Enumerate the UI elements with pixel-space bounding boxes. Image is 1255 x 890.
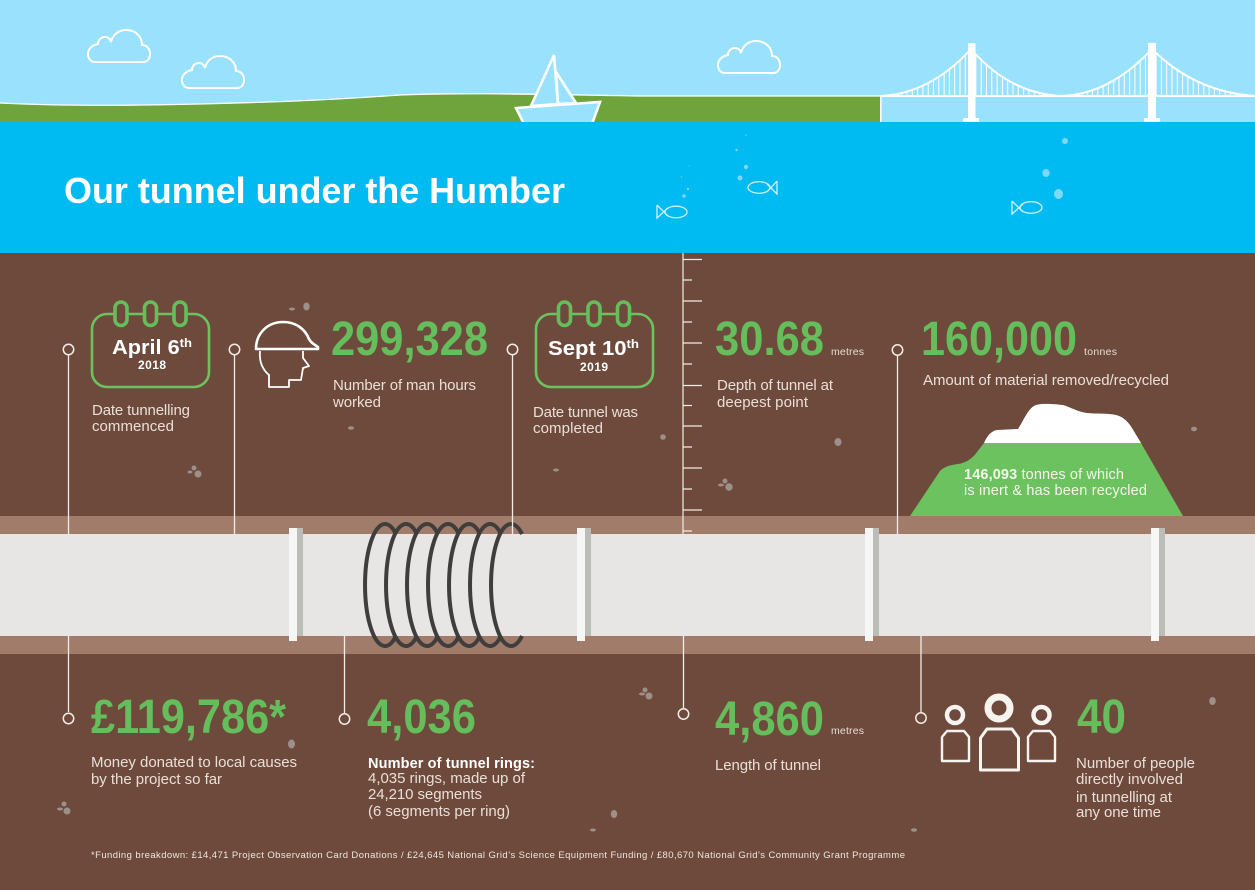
stat: people involved: directly involved — [1076, 771, 1183, 788]
icon: spoil heap: 146,093 tonnes of which — [964, 467, 1124, 483]
stat: tunnel rings — [367, 691, 535, 820]
icon: cloud three — [718, 41, 780, 73]
stat: tunnel length: 4,860 — [715, 693, 824, 746]
stat: tunnelling start date: 2018 — [138, 358, 166, 372]
stat: tunnel rings: (6 segments per ring) — [368, 803, 510, 820]
icon: fish three — [1012, 201, 1042, 214]
title: Our tunnel under the Humber — [64, 170, 565, 211]
stat: tunnel completion date: Date tunnel was — [533, 404, 638, 421]
icon: fish two — [748, 181, 777, 194]
tunnel joints — [289, 528, 1165, 641]
icon: cloud one — [88, 30, 150, 62]
stat: tunnel depth — [715, 313, 864, 411]
icon: spoil heap: is inert & has been recycled — [964, 483, 1147, 499]
stat: tunnel length: Length of tunnel — [715, 757, 821, 774]
icon: worker in hard hat — [256, 322, 318, 387]
bubbles — [681, 134, 1068, 199]
stat: tunnelling start date: Date tunnelling — [92, 402, 190, 419]
stat: tunnel rings: Number of tunnel rings: — [368, 756, 535, 772]
icon: cloud two — [182, 56, 244, 88]
stat: material removed: Amount of material removed/recycled — [923, 372, 1169, 389]
stat: tunnel rings: 24,210 segments — [368, 786, 482, 803]
stat: material removed: 160,000 — [921, 313, 1077, 366]
stat: tunnel completion date: 2019 — [580, 360, 608, 374]
connector lines — [63, 344, 926, 724]
icon: three people — [942, 697, 1055, 770]
stat: tunnelling start date: th — [180, 336, 192, 350]
icon: suspension bridge — [880, 43, 1255, 122]
stat: man hours — [256, 313, 488, 411]
icon: fish one — [657, 205, 687, 218]
panel: tunnel — [0, 516, 1255, 654]
stat: money donated: by the project so far — [91, 771, 222, 788]
icon: calendar — [536, 302, 653, 387]
stat: material removed: tonnes — [1084, 346, 1117, 358]
stat: tunnelling start date: April 6 — [112, 337, 174, 359]
stat: people involved: 40 — [1077, 691, 1126, 744]
stat: tunnel depth: Depth of tunnel at — [717, 377, 834, 394]
stat: tunnel rings: 4,036 — [367, 691, 476, 744]
stat: money donated — [91, 691, 297, 788]
stat: tunnel length: metres — [831, 725, 864, 737]
icon: tunnel rings — [365, 524, 522, 646]
panel: earth — [0, 253, 1255, 890]
stat: money donated: £119,786* — [91, 691, 286, 744]
depth scale ruler — [683, 253, 702, 534]
stat: people involved: Number of people — [1076, 755, 1195, 772]
stat: people involved — [942, 691, 1195, 821]
stat: tunnel depth: 30.68 — [715, 313, 824, 366]
stat: people involved: any one time — [1076, 804, 1161, 821]
panel: sky and landscape — [0, 0, 1255, 122]
stat: man hours: Number of man hours — [333, 377, 476, 394]
stat: tunnel depth: metres — [831, 346, 864, 358]
stat: tunnel completion date: th — [627, 337, 639, 351]
stat: tunnel completion date: Sept 10 — [548, 338, 619, 360]
stat: material removed — [910, 313, 1183, 516]
icon: calendar — [92, 302, 209, 387]
stat: man hours: 299,328 — [331, 313, 488, 366]
pebbles — [57, 302, 1216, 832]
stat: tunnel length — [715, 693, 864, 774]
stat: tunnelling start date: commenced — [92, 418, 174, 435]
stat: tunnel completion date — [533, 302, 653, 437]
stat: tunnel depth: deepest point — [717, 394, 809, 411]
footnote: *Funding breakdown: £14,471 Project Observation Card Donations / £24,645 National Grid’s Science Equipment Funding / £80,670 National Grid’s Community Grant Programme — [91, 850, 905, 861]
icon: sailing boat — [516, 55, 600, 124]
stat: people involved: in tunnelling at — [1076, 789, 1173, 806]
stat: tunnelling start date — [92, 302, 209, 435]
stat: money donated: Money donated to local causes — [91, 754, 297, 771]
icon: spoil heap — [910, 404, 1183, 516]
stat: tunnel rings: 4,035 rings, made up of — [368, 770, 526, 787]
stat: tunnel completion date: completed — [533, 420, 603, 437]
panel: water — [0, 122, 1255, 253]
stat: man hours: worked — [332, 394, 381, 411]
